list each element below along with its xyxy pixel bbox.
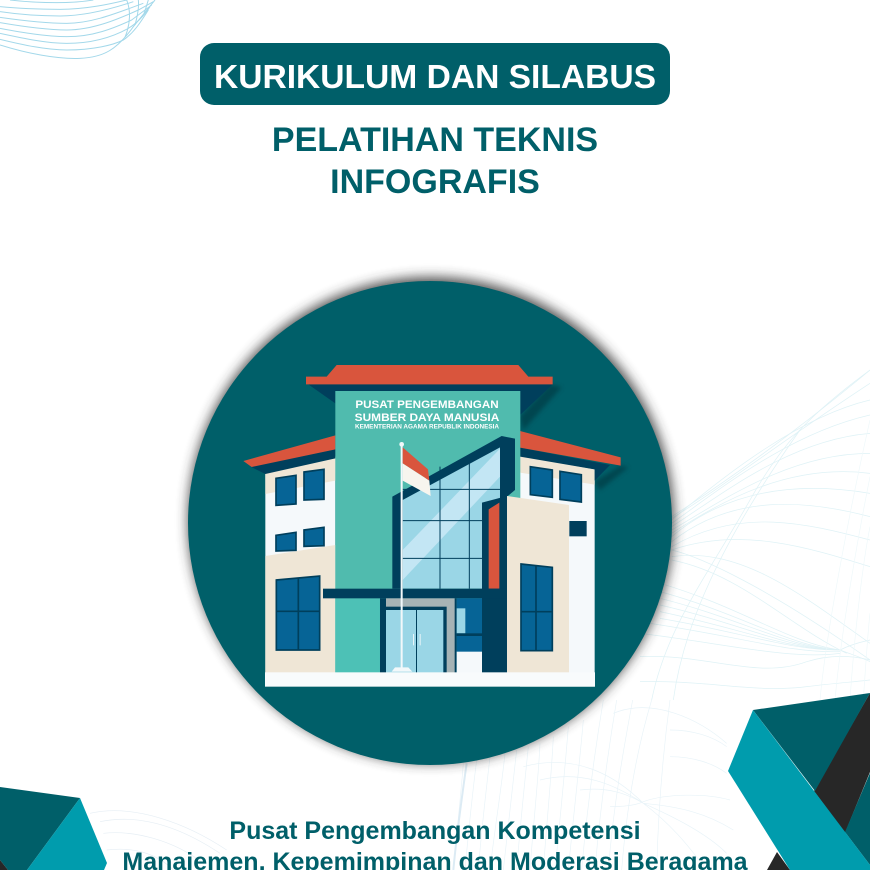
organisation name bbox=[122, 817, 748, 870]
bottom-left ribbon bbox=[0, 787, 80, 870]
building shadow bbox=[520, 384, 628, 490]
ground bbox=[265, 672, 595, 687]
glass facade bbox=[403, 447, 500, 589]
subtitle: PELATIHAN TEKNIS bbox=[272, 121, 598, 159]
organisation name: Pusat Pengembangan Kompetensi bbox=[229, 817, 641, 845]
subtitle bbox=[272, 121, 598, 201]
subtitle: INFOGRAFIS bbox=[330, 163, 540, 201]
sign text: KEMENTERIAN AGAMA REPUBLIK INDONESIA bbox=[355, 425, 500, 431]
canopy bbox=[323, 589, 531, 598]
title banner: KURIKULUM DAN SILABUS bbox=[214, 59, 656, 96]
sign text: PUSAT PENGEMBANGAN bbox=[355, 399, 499, 411]
title banner bbox=[200, 43, 670, 105]
central tower bbox=[335, 391, 520, 673]
red roofs bbox=[306, 365, 553, 384]
windows bbox=[276, 467, 581, 651]
side wings bbox=[265, 457, 335, 673]
circle shadow bbox=[188, 277, 674, 763]
building bbox=[243, 365, 628, 687]
roof underside bbox=[251, 449, 335, 474]
sign text: SUMBER DAYA MANUSIA bbox=[355, 412, 499, 424]
flag and pole bbox=[392, 442, 431, 672]
sign text bbox=[355, 399, 500, 431]
right wing block bbox=[507, 496, 569, 673]
entrance bbox=[380, 598, 457, 673]
teal circle bbox=[188, 281, 672, 765]
